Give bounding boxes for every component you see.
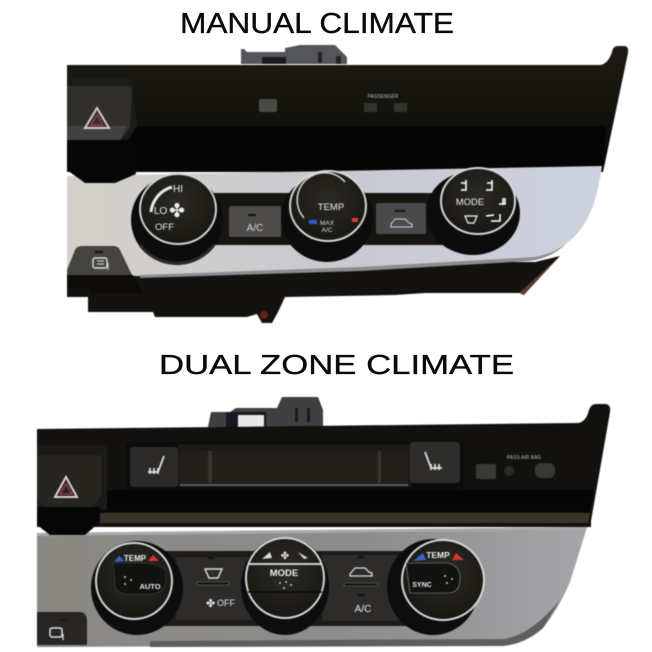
- rear defrost button: [37, 612, 87, 645]
- panel: dual zone climate control: [37, 397, 610, 647]
- knob: temp: A/C: [322, 227, 333, 234]
- lower dark housing: [67, 256, 560, 323]
- mounting clip: [208, 397, 323, 427]
- hazard base: [37, 507, 100, 535]
- knob: left temp auto: AUTO: [139, 582, 161, 591]
- A/C button: [229, 206, 281, 237]
- upper fascia: [37, 404, 610, 527]
- brown reflection band: [60, 513, 590, 523]
- right tab: [519, 258, 558, 295]
- mounting clip: [241, 45, 347, 64]
- recirculation button: [376, 203, 426, 234]
- A/C button: A/C: [247, 223, 263, 234]
- knob: fan: OFF: [155, 222, 174, 233]
- button base: [67, 275, 144, 293]
- knob: center mode: ✤: [281, 551, 289, 562]
- hazard base: [67, 140, 136, 183]
- dark recessed band: [67, 126, 606, 170]
- trim top highlight: [37, 527, 587, 536]
- right seat heater button: [410, 442, 460, 483]
- knob: mode: [426, 168, 520, 255]
- left seat heater button: [130, 447, 178, 487]
- center-left buttons: [176, 557, 252, 620]
- knob: temp: TEMP: [318, 202, 344, 213]
- airbag indicators: PASS AIR BAG: [507, 455, 541, 461]
- silver trim bottom edge: [140, 243, 567, 278]
- silver trim: [37, 527, 587, 647]
- knob: right temp sync: TEMP: [426, 550, 450, 560]
- knob: fan: LO: [154, 206, 168, 217]
- airbag indicators: [476, 455, 555, 479]
- rear defrost button: [67, 246, 144, 293]
- seatbelt indicator: [259, 99, 277, 112]
- display surround: [126, 442, 464, 490]
- knob: center mode: [241, 537, 329, 635]
- center-left buttons: OFF: [217, 598, 235, 608]
- trim bottom edge: [150, 600, 560, 647]
- knob: temp: MAX: [320, 220, 335, 227]
- center-right buttons: [322, 555, 398, 621]
- knob: temp: [281, 171, 373, 262]
- knob: left temp auto: [91, 541, 183, 635]
- passenger airbag label: [364, 94, 407, 112]
- passenger airbag label: PASSENGER: [368, 94, 399, 100]
- recirculation icon: [350, 568, 372, 576]
- panel: manual climate control: [67, 45, 628, 323]
- red pin: [260, 311, 268, 319]
- glossy upper fascia: [67, 46, 628, 172]
- mode icons: [461, 180, 467, 190]
- knob: mode: MODE: [456, 197, 484, 208]
- hazard button: [37, 445, 107, 535]
- windshield defrost icon: [205, 569, 222, 578]
- fan icon: ✤: [169, 201, 185, 222]
- knob: right temp sync: [387, 539, 484, 635]
- knob: left temp auto: TEMP: [124, 554, 147, 563]
- hazard button: [67, 78, 137, 183]
- title: manual climate: MANUAL CLIMATE: [180, 8, 454, 40]
- central dark strip behind buttons: [205, 193, 450, 245]
- center-left buttons: ✤: [206, 598, 215, 610]
- knob: right temp sync: SYNC: [412, 582, 432, 589]
- knob: fan: HI: [173, 184, 183, 195]
- recessed band: [37, 490, 594, 512]
- knob: center mode: MODE: [270, 568, 298, 579]
- display window: [178, 444, 412, 487]
- center-right buttons: A/C: [355, 604, 371, 615]
- title: dual zone climate: DUAL ZONE CLIMATE: [159, 349, 514, 380]
- center dark strip: [160, 551, 430, 626]
- knob: fan: [131, 174, 223, 265]
- silver trim: [67, 166, 602, 276]
